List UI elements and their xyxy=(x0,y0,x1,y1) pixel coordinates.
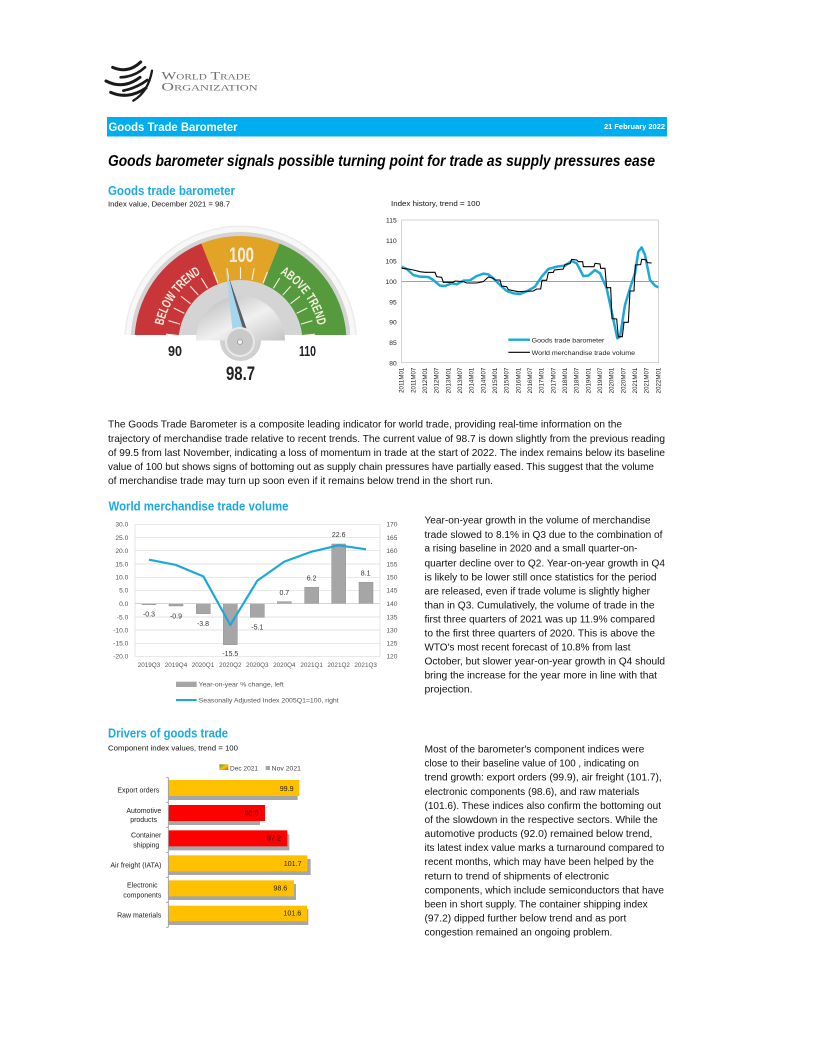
bar values: 101.7 xyxy=(284,860,302,868)
gauge zone labels: 100 xyxy=(229,244,254,267)
quarter labels: 2021Q3 xyxy=(354,662,377,669)
quarter labels: 2020Q1 xyxy=(192,662,215,669)
heading: Drivers of goods trade: Drivers of goods trade xyxy=(108,727,228,741)
data labels: 22.6 xyxy=(332,532,346,539)
data labels: -15.5 xyxy=(222,651,238,658)
right axis labels: 125 xyxy=(386,641,398,648)
text block: drivers commentary: congestion remained an ongoing problem. xyxy=(424,928,612,939)
right axis labels: 160 xyxy=(386,548,398,555)
line chart subtitle: Index history, trend = 100 xyxy=(391,199,480,208)
x axis labels: 2019M01 xyxy=(585,367,592,393)
drivers subtitle: Component index values, trend = 100 xyxy=(108,744,238,753)
left axis labels: 20.0 xyxy=(115,548,129,555)
text block: drivers commentary: close to their baseline value of 100 , indicating on xyxy=(424,759,639,770)
heading: Goods trade barometer: Goods trade barometer xyxy=(108,184,235,198)
right axis labels: 145 xyxy=(386,588,398,595)
category labels: components xyxy=(123,892,162,899)
y axis labels: 100 xyxy=(386,279,397,286)
text block: drivers commentary: automotive products (92.0) remained below trend, xyxy=(424,829,652,840)
bar values: 92.0 xyxy=(245,810,259,818)
line chart legend xyxy=(508,337,635,357)
quarter labels: 2020Q2 xyxy=(219,662,242,669)
quarter labels: 2020Q4 xyxy=(273,662,296,669)
x axis labels: 2018M07 xyxy=(574,367,581,393)
y axis labels: 115 xyxy=(386,218,397,225)
bar values xyxy=(245,785,302,918)
x axis labels: 2017M07 xyxy=(550,367,557,393)
combo chart: trade volume xyxy=(113,522,398,704)
text block: drivers commentary xyxy=(424,745,665,939)
text block: drivers commentary: Most of the barometer's component indices were xyxy=(424,745,645,756)
left axis labels xyxy=(113,522,129,661)
bar values: 97.2 xyxy=(267,835,281,843)
legend: Seasonally Adjusted Index 2005Q1=100, right xyxy=(199,697,339,704)
data labels xyxy=(143,532,371,658)
grid lines xyxy=(135,524,380,656)
x axis labels: 2016M07 xyxy=(527,367,534,393)
chart legend: Nov 2021 xyxy=(272,766,301,773)
text block: drivers commentary: components, which include semiconductors that have xyxy=(424,885,664,896)
x axis labels: 2016M01 xyxy=(515,367,522,393)
data labels: -0.3 xyxy=(143,612,155,619)
gauge subtitle: Index value, December 2021 = 98.7 xyxy=(108,200,230,208)
text block: drivers commentary: (101.6). These indices also confirm the bottoming out xyxy=(424,801,661,812)
gauge zone labels xyxy=(154,244,326,325)
text block: drivers commentary: of the slowdown in the respective sectors. While the xyxy=(424,815,658,826)
series: goods trade barometer xyxy=(402,247,658,338)
left axis labels: 10.0 xyxy=(115,575,129,582)
heading: World merchandise trade volume: World merchandise trade volume xyxy=(108,500,289,514)
x axis labels: 2022M01 xyxy=(655,367,662,393)
gauge needle xyxy=(226,270,247,332)
text block: trade volume commentary: to the first three quarters of 2020. This is above the xyxy=(424,629,655,640)
quarter labels: 2019Q4 xyxy=(165,662,188,669)
logo: World Trade Organization xyxy=(106,62,258,101)
x axis labels: 2019M07 xyxy=(597,367,604,393)
text block: trade volume commentary: are released, even if trade volume is slightly higher xyxy=(424,587,651,598)
text block: barometer introduction xyxy=(108,420,665,487)
gauge scale values: 90 xyxy=(168,343,182,360)
x axis labels: 2018M01 xyxy=(562,367,569,393)
chart legend xyxy=(219,764,301,773)
text block: trade volume commentary: Year-on-year growth in the volume of merchandise xyxy=(424,516,651,527)
text block: drivers commentary: been in short supply. The container shipping index xyxy=(424,899,648,910)
text block: drivers commentary: its latest index value marks a turnaround compared to xyxy=(424,843,665,854)
category labels: Automotive xyxy=(126,808,161,815)
x axis labels: 2017M01 xyxy=(539,367,546,393)
banner date: 21 February 2022 xyxy=(604,122,665,131)
x axis labels: 2021M07 xyxy=(644,367,651,393)
quarter labels: 2021Q1 xyxy=(300,662,323,669)
right axis labels: 165 xyxy=(386,535,398,542)
bar values: 99.9 xyxy=(280,785,294,793)
y axis labels: 90 xyxy=(389,320,397,327)
text block: barometer introduction: of merchandise trade may turn up soon even if it remains below trend in the short run. xyxy=(108,476,493,487)
logo wordmark: World Trade xyxy=(161,70,251,82)
y axis labels: 105 xyxy=(386,258,397,265)
gauge scale values: 98.7 xyxy=(226,364,255,385)
bar chart: drivers of goods trade xyxy=(110,764,311,927)
left axis labels: 30.0 xyxy=(115,522,129,529)
gauge chart xyxy=(124,226,357,385)
left axis labels: 25.0 xyxy=(115,535,129,542)
bars: year-on-year change xyxy=(142,544,373,645)
left axis labels: -10.0 xyxy=(113,627,129,634)
right axis labels: 170 xyxy=(386,522,398,529)
category labels: Container xyxy=(131,833,162,840)
x axis labels: 2015M01 xyxy=(492,367,499,393)
left axis labels: 5.0 xyxy=(119,588,129,595)
category labels: Electronic xyxy=(127,883,158,890)
left axis labels: -15.0 xyxy=(113,641,129,648)
x axis labels: 2012M07 xyxy=(434,367,441,393)
right axis labels: 120 xyxy=(386,654,398,661)
y axis labels: 110 xyxy=(386,238,397,245)
category labels: shipping xyxy=(133,842,159,849)
text block: drivers commentary: electronic components (98.6), and raw materials xyxy=(424,787,639,798)
plot frame xyxy=(402,220,658,363)
gauge scale values: 110 xyxy=(299,343,316,360)
x axis labels xyxy=(399,367,662,393)
header banner xyxy=(107,117,667,136)
logo wordmark xyxy=(161,70,258,94)
x axis labels: 2011M01 xyxy=(399,367,406,393)
text block: barometer introduction: of 99.5 from last November, indicating a loss of momentum in trade at the start of 2022. The index remains below its baseline xyxy=(108,448,665,459)
right axis labels: 135 xyxy=(386,614,398,621)
x axis labels: 2020M01 xyxy=(609,367,616,393)
category labels: products xyxy=(130,817,157,824)
x axis labels: 2014M01 xyxy=(469,367,476,393)
gauge zone labels: ABOVE TREND xyxy=(280,267,326,324)
y axis labels xyxy=(386,218,397,367)
right axis labels: 130 xyxy=(386,627,398,634)
data labels: 6.2 xyxy=(307,575,317,582)
x axis labels: 2013M01 xyxy=(445,367,452,393)
gauge zone: on trend xyxy=(201,236,280,284)
text block: trade volume commentary: projection. xyxy=(424,685,472,696)
x axis labels: 2011M07 xyxy=(410,367,417,393)
x axis labels: 2020M07 xyxy=(620,367,627,393)
text block: trade volume commentary: bring the increase for the year more in line with that xyxy=(424,671,657,682)
right axis labels xyxy=(386,522,398,661)
x axis labels: 2014M07 xyxy=(480,367,487,393)
x axis labels: 2013M07 xyxy=(457,367,464,393)
data labels: -5.1 xyxy=(251,625,263,632)
category labels: Export orders xyxy=(117,787,160,794)
right axis labels: 150 xyxy=(386,575,398,582)
icon: WTO globe swooshes xyxy=(106,62,152,101)
logo wordmark: Organization xyxy=(161,82,258,94)
main title: Goods barometer signals possible turning point for trade as supply pressures ease xyxy=(108,153,655,170)
data labels: -3.8 xyxy=(197,621,209,628)
y axis labels: 80 xyxy=(389,360,397,367)
text block: trade volume commentary: than in Q3. Cumulatively, the volume of trade in the xyxy=(424,601,655,612)
text block: trade volume commentary: trade slowed to 8.1% in Q3 due to the combination of xyxy=(424,530,663,541)
bar values: 98.6 xyxy=(273,885,287,893)
line chart legend: World merchandise trade volume xyxy=(532,350,635,357)
left axis labels: 0.0 xyxy=(119,601,129,608)
line chart legend: Goods trade barometer xyxy=(532,337,605,344)
gauge zone: above trend xyxy=(263,244,346,342)
text block: barometer introduction: trajectory of merchandise trade relative to recent trends. The current value of 98.7 is down slightly from the previous reading xyxy=(108,434,665,445)
line: seasonally adjusted index xyxy=(149,545,366,625)
gauge dial xyxy=(196,270,285,361)
data labels: 0.7 xyxy=(279,590,289,597)
text block: drivers commentary: trend growth: export orders (99.9), air freight (101.7), xyxy=(424,773,662,784)
bar values: 101.6 xyxy=(283,910,301,918)
category labels xyxy=(110,787,162,919)
data labels: -0.9 xyxy=(170,614,182,621)
x axis labels: 2015M07 xyxy=(504,367,511,393)
gauge scale values xyxy=(168,343,316,385)
x axis labels: 2021M01 xyxy=(632,367,639,393)
axis xyxy=(166,777,168,927)
left axis labels: 15.0 xyxy=(115,561,129,568)
text block: drivers commentary: return to trend of shipments of electronic xyxy=(424,871,609,882)
right axis labels: 155 xyxy=(386,561,398,568)
y axis labels: 95 xyxy=(389,299,397,306)
quarter labels: 2020Q3 xyxy=(246,662,269,669)
December bars xyxy=(169,780,307,921)
x axis labels: 2012M01 xyxy=(422,367,429,393)
category labels: Air freight (IATA) xyxy=(110,862,161,869)
series: world merchandise trade volume xyxy=(402,259,652,337)
y axis labels: 85 xyxy=(389,340,397,347)
text block: trade volume commentary: October, but slower year-on-year growth in Q4 should xyxy=(424,657,665,668)
text block: barometer introduction: The Goods Trade Barometer is a composite leading indicator for world trade, providing real-time information on the xyxy=(108,420,622,431)
legend: Year-on-year % change, left xyxy=(199,682,284,689)
legend xyxy=(176,682,339,704)
left axis labels: -20.0 xyxy=(113,654,129,661)
gauge zone labels: BELOW TREND xyxy=(154,268,200,325)
text block: trade volume commentary xyxy=(424,516,665,696)
text block: barometer introduction: value of 100 but shows signs of bottoming out as supply chain pressures have partially eased. This suggest that the volume xyxy=(108,462,654,473)
text block: trade volume commentary: quarter decline over to Q2. Year-on-year growth in Q4 xyxy=(424,558,665,569)
quarter labels: 2021Q2 xyxy=(327,662,350,669)
gauge zone: below trend xyxy=(134,244,218,342)
left axis labels: -5.0 xyxy=(117,614,129,621)
text block: trade volume commentary: WTO's most recent forecast of 10.8% from last xyxy=(424,643,631,654)
text block: trade volume commentary: a rising baseline in 2020 and a small quarter-on- xyxy=(424,544,638,555)
category labels: Raw materials xyxy=(117,912,162,919)
text block: trade volume commentary: first three quarters of 2021 was up 11.9% compared xyxy=(424,615,655,626)
chart legend: Dec 2021 xyxy=(230,766,258,773)
November shadow bars xyxy=(169,784,311,925)
line chart: index history xyxy=(386,218,662,393)
quarter labels xyxy=(138,662,377,669)
text block: trade volume commentary: is likely to be lower still once statistics for the period xyxy=(424,573,657,584)
text block: drivers commentary: (97.2) dipped further below trend and as port xyxy=(424,913,626,924)
data labels: 8.1 xyxy=(361,570,371,577)
right axis labels: 140 xyxy=(386,601,398,608)
text block: drivers commentary: recent months, which may have been helped by the xyxy=(424,857,654,868)
quarter labels: 2019Q3 xyxy=(138,662,161,669)
banner title: Goods Trade Barometer xyxy=(108,122,238,134)
